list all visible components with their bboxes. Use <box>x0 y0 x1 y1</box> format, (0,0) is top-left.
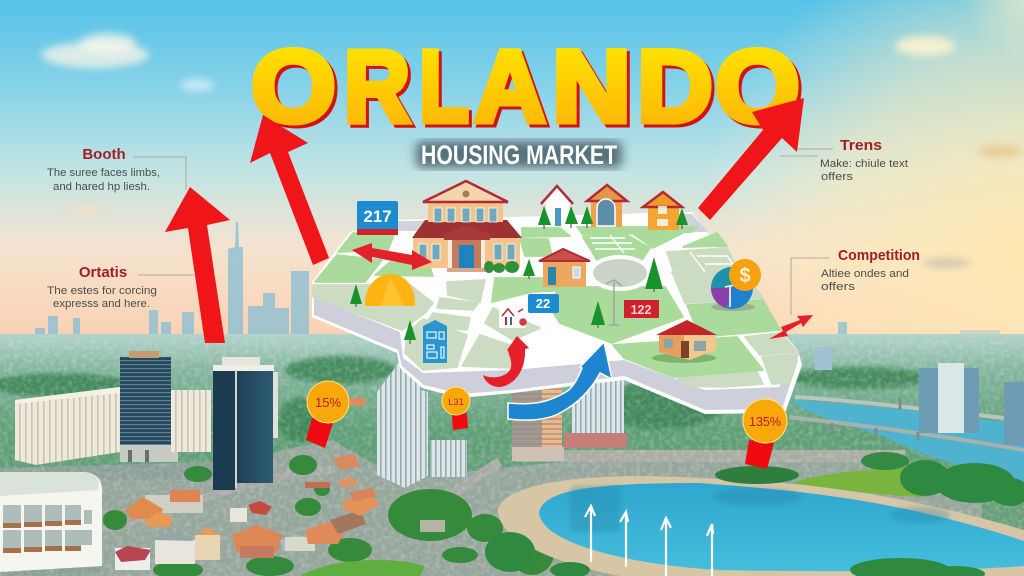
sign 217: 217 <box>363 207 392 226</box>
bridge <box>789 397 1024 450</box>
wind poles <box>585 506 713 576</box>
title: ORLANDO: N <box>552 30 631 144</box>
white house <box>541 186 573 227</box>
title: ORLANDO: L <box>422 32 472 147</box>
title: ORLANDO: O <box>718 33 803 147</box>
title: ORLANDO: R <box>347 32 413 147</box>
background: city ground <box>0 334 1024 576</box>
building group: centre towers <box>377 350 627 488</box>
reflections <box>570 486 950 532</box>
callout: Ortatis <box>47 264 194 310</box>
pie chart with coin <box>711 259 761 311</box>
bright green parcels <box>315 227 780 377</box>
orange house <box>643 192 682 230</box>
title: ORLANDO: A <box>474 30 546 144</box>
clouds <box>41 33 1022 267</box>
background: sky <box>0 0 1024 345</box>
title: ORLANDO: O <box>715 30 800 144</box>
main civic building <box>412 181 522 273</box>
lake with promenade <box>300 452 1024 576</box>
small house marker <box>499 309 527 328</box>
back strips <box>398 214 708 232</box>
red arrow: upper right <box>698 98 804 220</box>
dark striped tower <box>120 351 178 462</box>
badge: small: L31 <box>448 397 464 408</box>
badge: 135%: 135% <box>749 415 781 429</box>
callout: Competition: Altiee ondes and <box>821 268 909 280</box>
red curved arrow <box>483 336 529 387</box>
callout: Booth: Booth <box>82 146 126 163</box>
map: isometric Orlando plot <box>312 181 813 420</box>
badge: 135% <box>743 399 787 469</box>
red double arrow on map <box>352 243 432 270</box>
gray-green parcels <box>313 248 798 387</box>
mid block <box>430 440 467 477</box>
badge: 15% <box>306 381 349 448</box>
callout: Competition: offers <box>821 281 856 293</box>
red arrow: upper left <box>250 115 329 265</box>
pie chart with coin: $ <box>739 265 751 287</box>
river <box>790 400 1024 482</box>
building group: left towers <box>0 351 278 572</box>
sign 22 <box>528 294 559 313</box>
callout: Competition: Competition <box>838 247 920 264</box>
badge: 15%: 15% <box>315 395 341 410</box>
callout: Trends: offers <box>821 171 854 183</box>
sign 122: 122 <box>631 303 651 317</box>
small houses with orange roofs <box>115 398 445 570</box>
mid house <box>539 249 590 287</box>
rounded building bottom-left <box>0 472 102 572</box>
red arrow: far left <box>165 187 230 343</box>
callout: Trends: Make: chiule text <box>820 158 908 170</box>
arched orange house <box>587 185 627 227</box>
callout: Booth: The suree faces limbs, <box>47 167 160 179</box>
dark glass tower <box>213 357 278 490</box>
title: ORLANDO: O <box>251 30 336 144</box>
land texture <box>0 340 1024 576</box>
roundabout <box>591 257 649 289</box>
white high-rise <box>512 353 627 461</box>
right towers <box>815 347 1024 445</box>
callout: Trends <box>780 137 908 183</box>
callout: Trends: Trens <box>840 137 882 154</box>
badge: small <box>442 387 470 430</box>
far green belts <box>0 356 930 442</box>
callout: Ortatis: The estes for corcing <box>47 285 157 297</box>
map base slab <box>312 212 802 414</box>
yellow dome <box>365 274 415 306</box>
bottom house <box>652 320 717 363</box>
blue growth arrow <box>508 342 612 420</box>
callout: Booth: and hared hp liesh. <box>53 181 150 193</box>
title: ORLANDO: D <box>637 29 713 143</box>
trees on map <box>350 206 688 344</box>
small red double arrow <box>769 315 813 339</box>
subtitle: HOUSING MARKET: HOUSING MARKET <box>421 140 617 170</box>
title: ORLANDO <box>251 29 803 147</box>
callout: Ortatis: expresss and here. <box>53 298 150 310</box>
white block right <box>171 390 211 452</box>
roads / ground <box>0 455 330 576</box>
blue building icon <box>423 320 447 363</box>
white spire tower <box>377 358 428 488</box>
sign 217 <box>357 201 398 235</box>
title: ORLANDO: O <box>254 33 339 147</box>
title: ORLANDO: N <box>555 33 634 147</box>
lot markings <box>590 235 733 272</box>
tan tower <box>512 350 562 447</box>
meadow and trees <box>792 465 925 497</box>
white block <box>15 387 120 465</box>
sign 122 <box>624 300 659 318</box>
trees <box>103 455 554 576</box>
title: ORLANDO: D <box>640 32 716 146</box>
callout: Booth <box>47 146 186 193</box>
title: ORLANDO: R <box>344 29 410 144</box>
title: ORLANDO: L <box>419 29 469 144</box>
callout: Ortatis: Ortatis <box>79 264 127 281</box>
sign 22: 22 <box>536 296 550 311</box>
distant skyline <box>35 222 1000 340</box>
wind turbine <box>606 280 622 325</box>
callout: Competition <box>791 247 920 315</box>
title: ORLANDO: A <box>477 33 549 147</box>
